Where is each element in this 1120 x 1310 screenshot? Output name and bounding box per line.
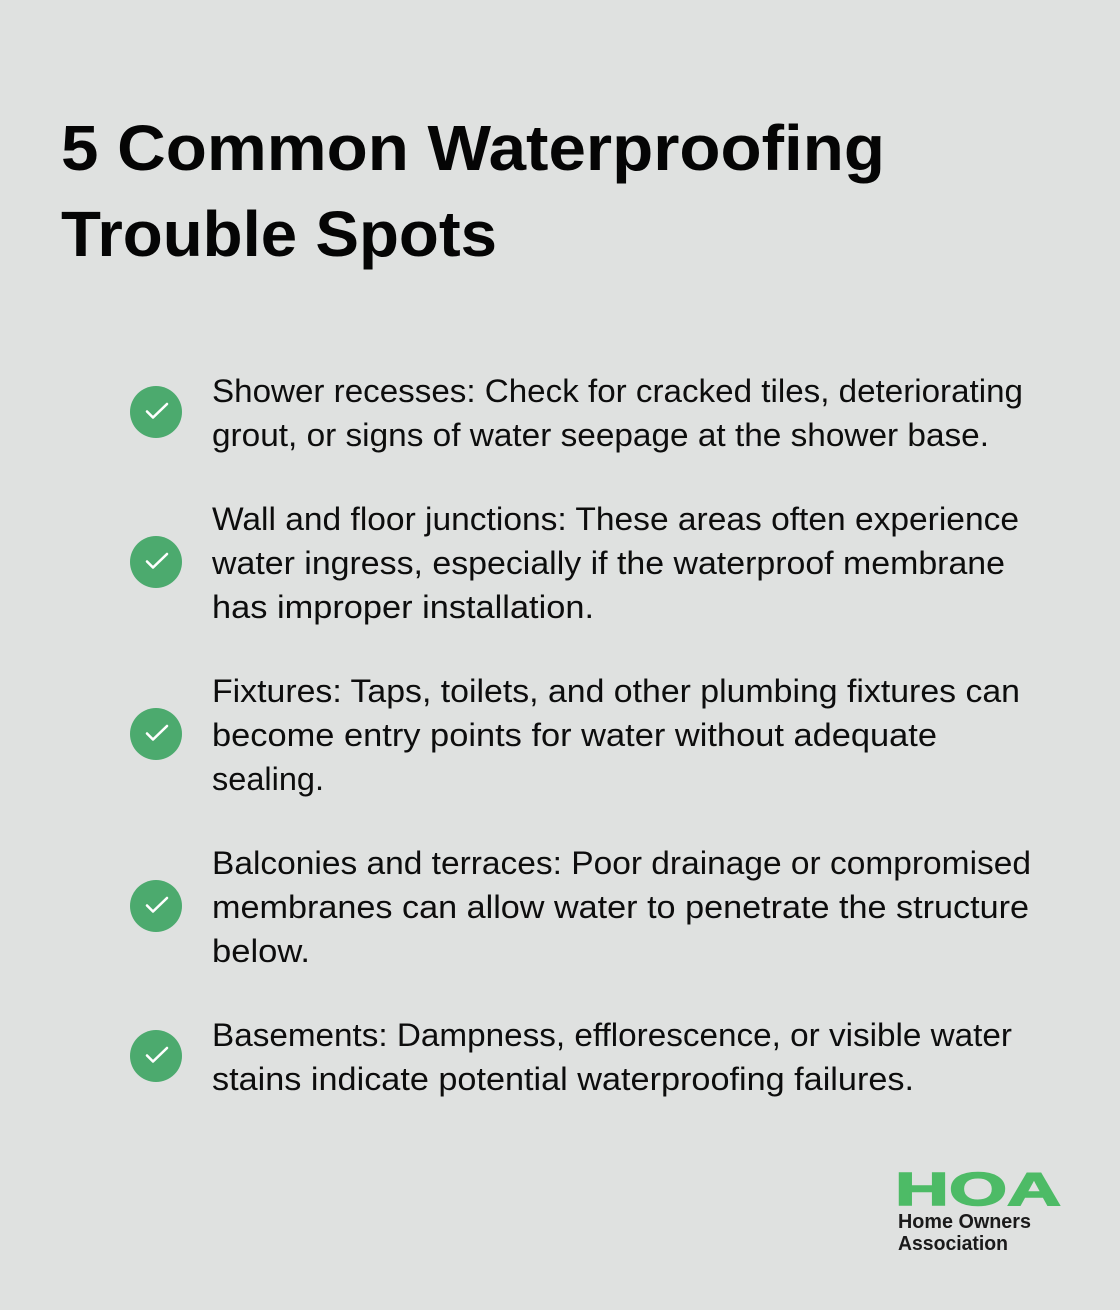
item: shower recesses bbox=[130, 373, 1023, 453]
icon: check circle bbox=[130, 880, 182, 932]
item text bbox=[212, 373, 1023, 453]
item text: grout, or signs of water seepage at the shower base. bbox=[212, 417, 989, 453]
item text: stains indicate potential waterproofing failures. bbox=[212, 1061, 914, 1097]
logo: HOA Home Owners Association bbox=[895, 1163, 1061, 1255]
item text: has improper installation. bbox=[212, 589, 594, 625]
item text: Balconies and terraces: Poor drainage or compromised bbox=[212, 845, 1031, 881]
item text bbox=[211, 501, 1019, 625]
item text: Fixtures: Taps, toilets, and other plumbing fixtures can bbox=[212, 673, 1020, 709]
item text: sealing. bbox=[212, 761, 324, 797]
item text bbox=[212, 673, 1020, 797]
icon: check circle bbox=[130, 536, 182, 588]
item text bbox=[212, 1017, 1012, 1097]
item text bbox=[212, 845, 1031, 969]
item text: Shower recesses: Check for cracked tiles, deteriorating bbox=[212, 373, 1023, 409]
item text: Wall and floor junctions: These areas often experience bbox=[212, 501, 1019, 537]
title bbox=[61, 112, 885, 270]
icon: check circle bbox=[130, 386, 182, 438]
logo: HOA Home Owners Association: Home Owners bbox=[898, 1211, 1031, 1233]
icon: check circle bbox=[130, 708, 182, 760]
item: fixtures bbox=[130, 673, 1020, 797]
logo: HOA Home Owners Association: Association bbox=[898, 1233, 1008, 1255]
item text: become entry points for water without adequate bbox=[212, 717, 937, 753]
item text: membranes can allow water to penetrate the structure bbox=[212, 889, 1029, 925]
icon: check circle bbox=[130, 1030, 182, 1082]
title: 5 Common Waterproofing bbox=[61, 112, 885, 184]
item text: water ingress, especially if the waterproof membrane bbox=[211, 545, 1005, 581]
checklist bbox=[130, 373, 1031, 1097]
item: balconies and terraces bbox=[130, 845, 1031, 969]
logo: HOA Home Owners Association: HOA bbox=[895, 1163, 1061, 1215]
item: wall and floor junctions bbox=[130, 501, 1019, 625]
item text: below. bbox=[212, 933, 310, 969]
item: basements bbox=[130, 1017, 1012, 1097]
item text: Basements: Dampness, efflorescence, or visible water bbox=[212, 1017, 1012, 1053]
title: Trouble Spots bbox=[61, 198, 497, 270]
